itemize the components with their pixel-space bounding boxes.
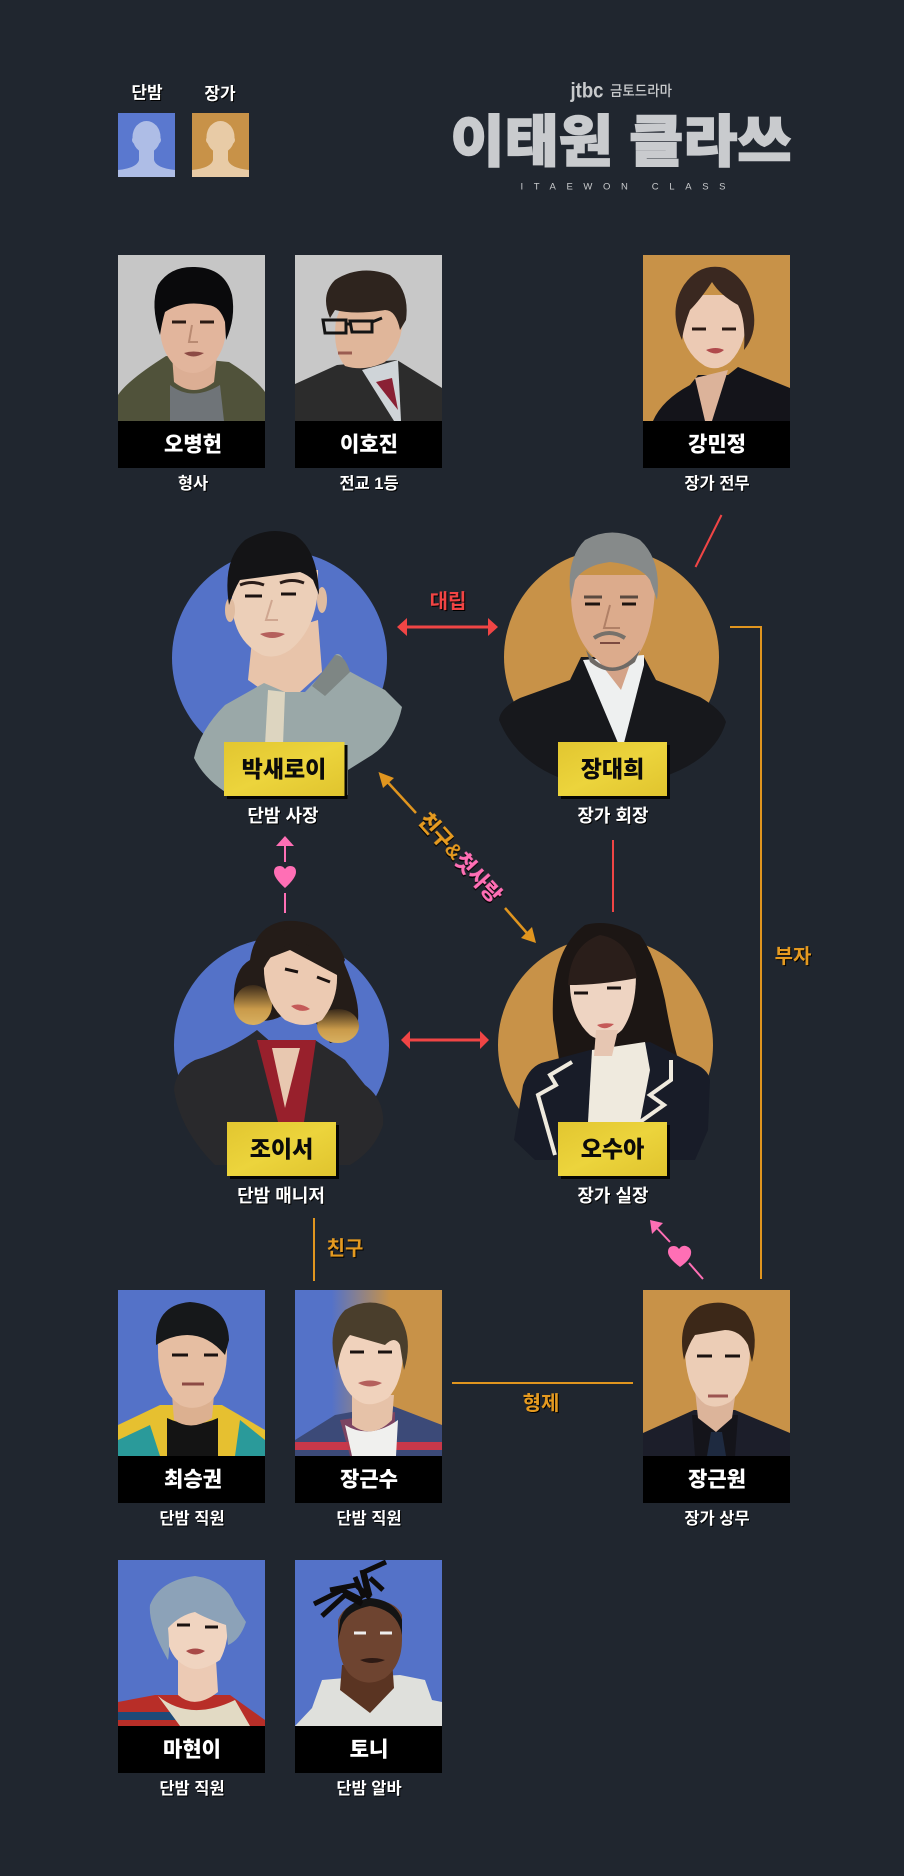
bracket: 부자: 부자 [775,945,811,968]
name bar [643,421,790,468]
name bar [118,1726,265,1773]
name: 강민정 [688,434,746,456]
title block [450,80,792,192]
role: 장가 전무 [684,474,750,493]
arrow: 친구 & 첫사랑: 친구&첫사랑 [414,809,506,907]
role: 전교 1등 [339,474,399,493]
legend [118,84,249,177]
circle background [174,938,389,1152]
name tag [558,1122,670,1179]
role: 단밤 사장 [247,806,319,826]
relation: 형제: 형제 [523,1392,559,1415]
relation: 친구 [314,1218,363,1281]
name tag [558,742,670,799]
name: 오병헌 [164,434,222,456]
card: 토니 [295,1560,442,1798]
name: 토니 [350,1738,388,1762]
portrait [295,255,442,421]
main title: 이태원 클라쓰 [450,110,792,174]
portrait [118,1560,265,1726]
broadcaster logo: jtbc [570,80,604,102]
portrait [118,1290,265,1456]
character: 조이서 [174,921,389,1206]
name tag: 오수아 [581,1136,644,1162]
circle background [172,550,387,766]
arrow: pink love, 장근원 to 오수아 [650,1220,703,1279]
card: 강민정 [643,255,790,493]
english subtitle: ITAEWON CLASS [520,182,726,192]
portrait [194,531,402,795]
circle background [504,550,719,764]
name bar [295,1726,442,1773]
role: 형사 [178,474,208,493]
card: 마현이 [118,1560,265,1798]
portrait [295,1290,442,1456]
name bar [118,421,265,468]
portrait [174,921,383,1165]
name bar [295,1456,442,1503]
broadcaster logo: 금토드라마 [610,83,672,100]
name bar [118,1456,265,1503]
name: 이호진 [340,434,398,456]
role: 장가 회장 [577,806,649,826]
name: 마현이 [163,1738,221,1762]
portrait [499,532,726,778]
circle background [498,938,713,1152]
relation line: 강민정 to 장대희 [696,515,722,567]
portrait [118,255,265,421]
role: 장가 실장 [577,1186,649,1206]
character: 박새로이 [172,531,402,826]
portrait [643,255,790,421]
name: 장근수 [340,1468,398,1492]
relation line: 장대희 to 오수아 [612,840,614,912]
character: 장대희 [499,532,726,826]
legend: jangga: 장가 [204,84,236,104]
role: 단밤 직원 [159,1779,225,1798]
card: 장근수 [295,1290,442,1528]
name tag: 박새로이 [242,756,326,782]
name: 장근원 [688,1468,746,1492]
role: 단밤 매니저 [237,1186,325,1206]
name tag: 조이서 [250,1136,313,1162]
card: 장근원 [643,1290,790,1528]
arrow: 조이서 to 오수아 [401,1031,489,1049]
role: 장가 상무 [684,1509,750,1528]
name tag [227,1122,339,1179]
card: 오병헌 [118,255,265,493]
bracket: 부자 [730,627,811,1279]
card: 이호진 [295,255,442,493]
name: 최승권 [164,1468,222,1492]
name bar [295,421,442,468]
character: 오수아 [498,923,713,1206]
arrow: 친구 & 첫사랑 [378,772,536,943]
name tag [224,742,348,799]
card: 최승권 [118,1290,265,1528]
portrait [295,1560,442,1726]
legend: danbam: 단밤 [131,84,163,102]
arrow: 대립 [397,590,498,636]
role: 단밤 직원 [336,1509,402,1528]
relation: 친구: 친구 [327,1237,363,1260]
portrait [514,923,710,1160]
name tag: 장대희 [581,756,644,782]
arrow: pink love, 조이서 to 박새로이 [274,836,296,913]
portrait [643,1290,790,1456]
broadcaster logo [570,80,672,102]
name bar [643,1456,790,1503]
arrow: 대립: 대립 [430,590,466,613]
role: 단밤 알바 [336,1778,402,1798]
role: 단밤 직원 [159,1509,225,1528]
